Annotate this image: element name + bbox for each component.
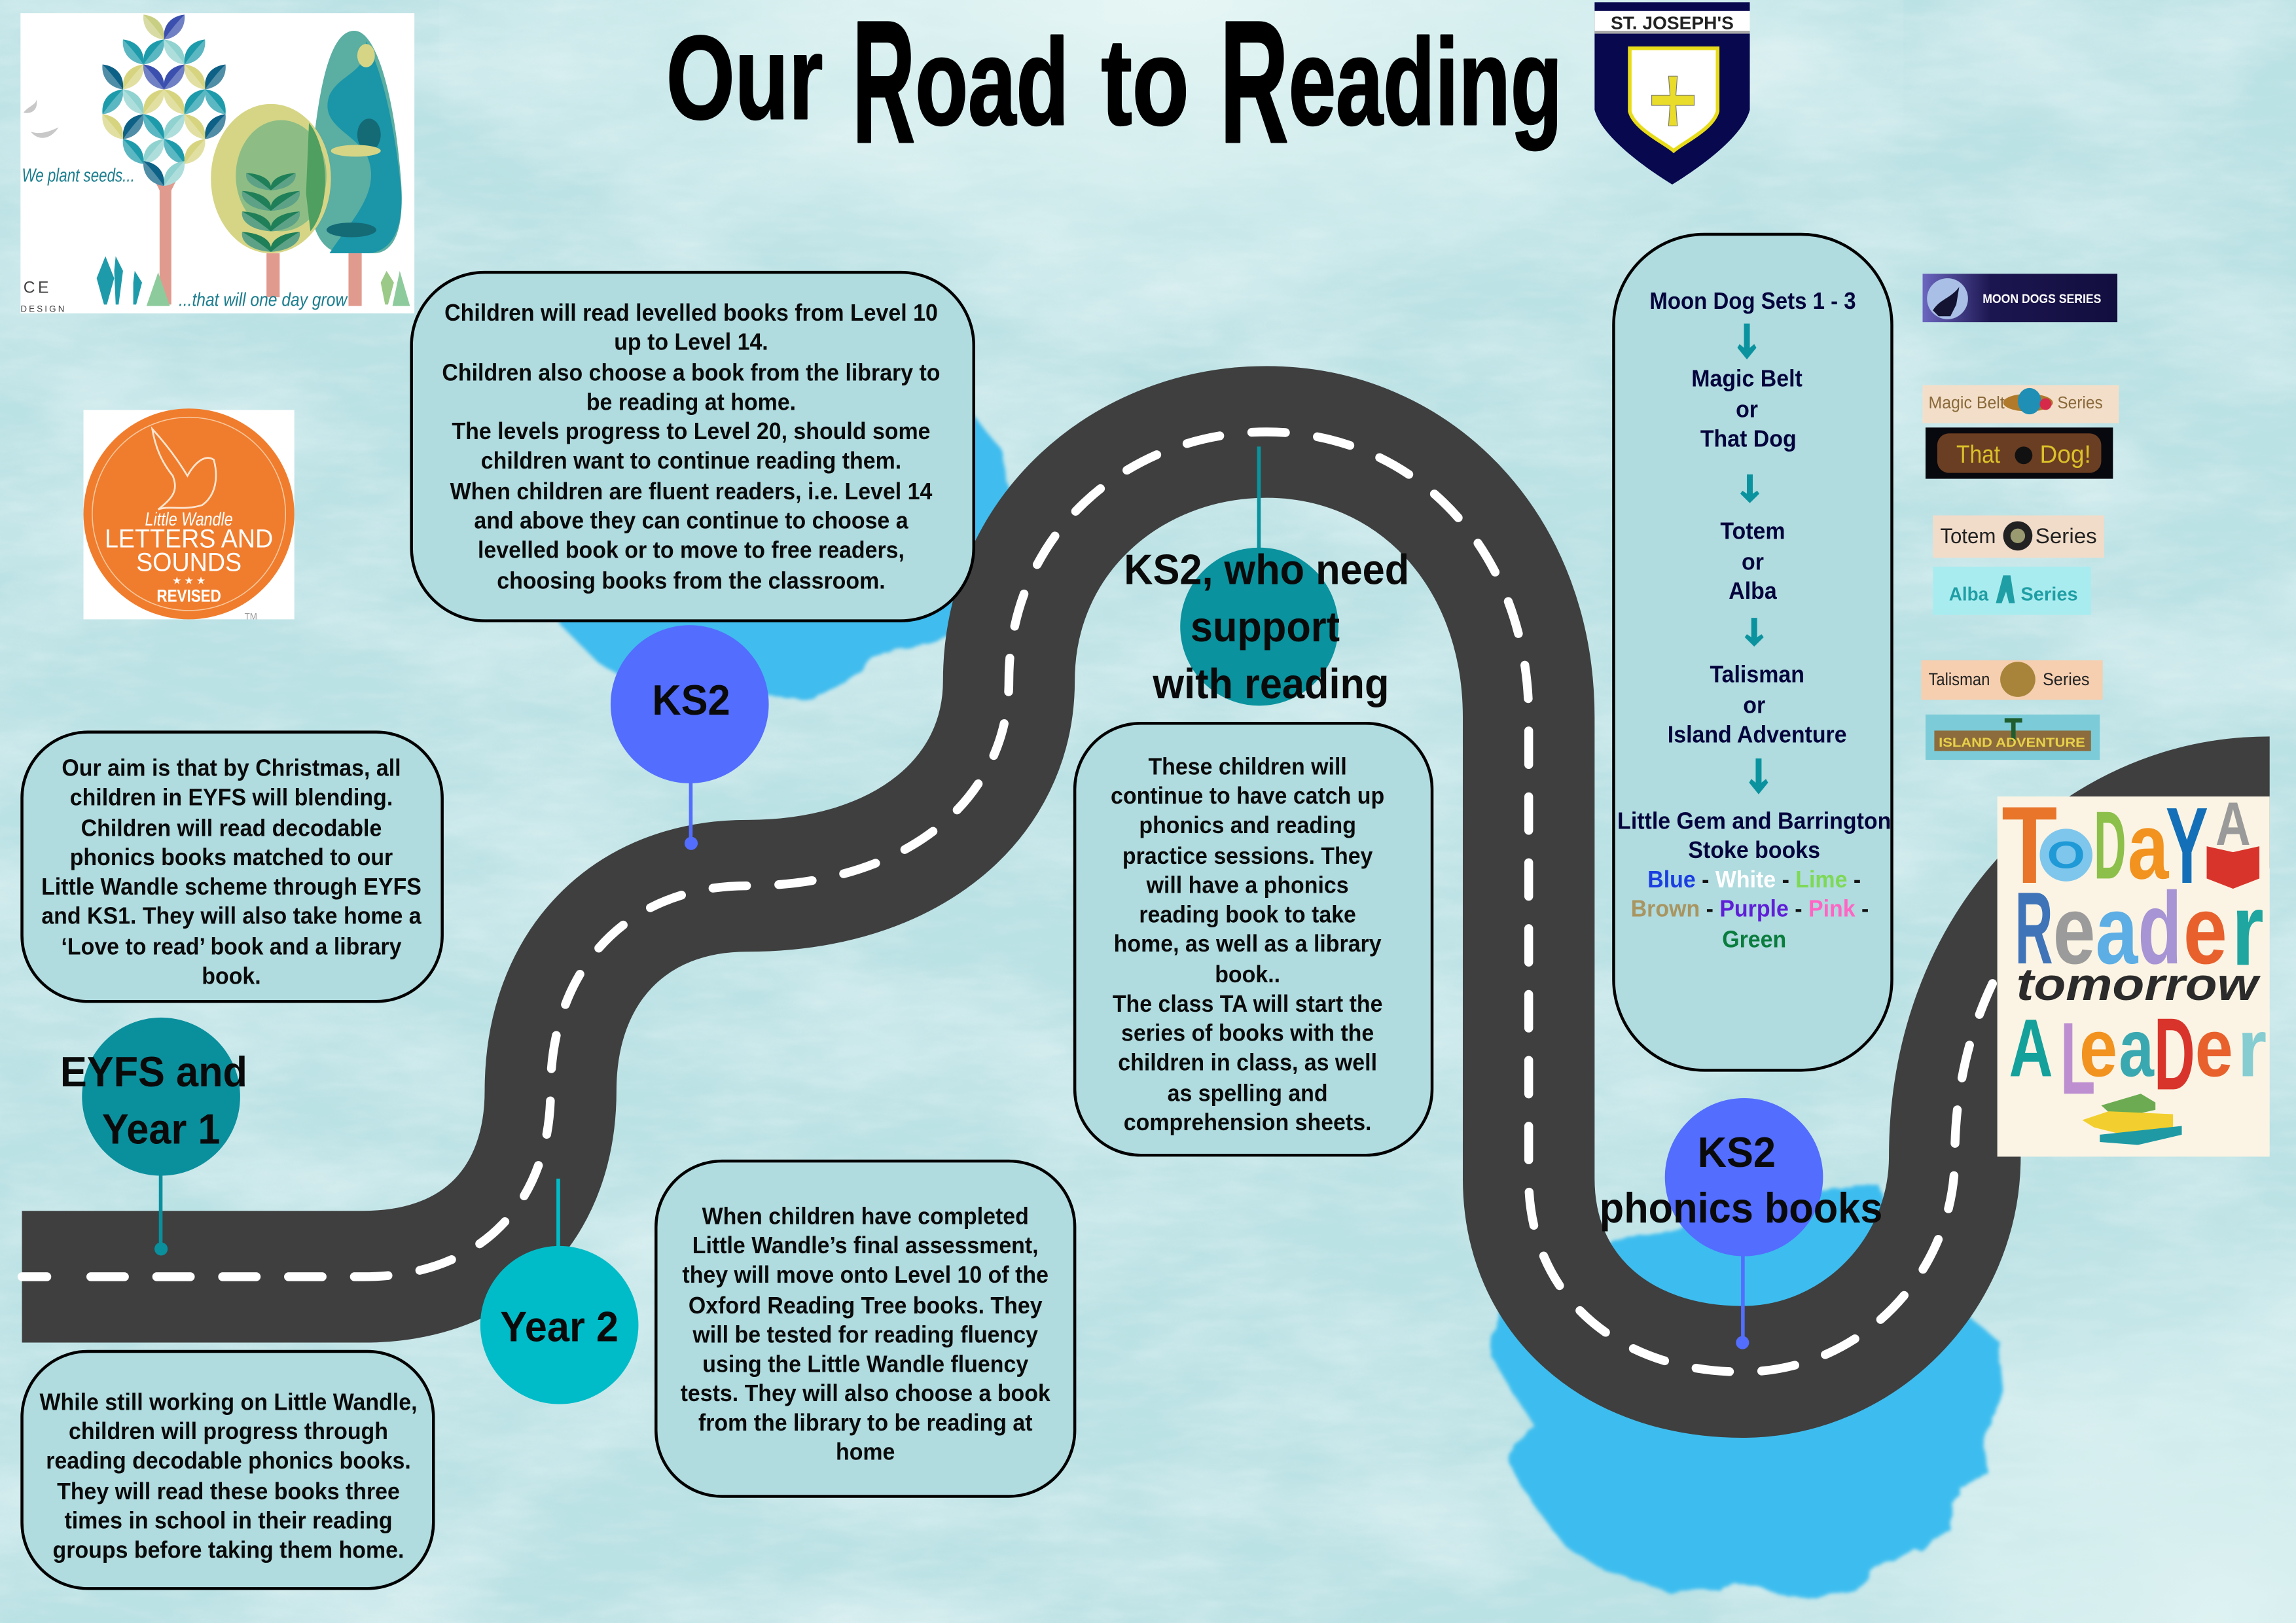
poster: Today a Reader tomorrow a Leader: L [2060, 1001, 2095, 1116]
panel: KS2 who need support: continue to have catch up [1111, 783, 1384, 810]
panel: KS2 phonics book series: or [1743, 692, 1765, 719]
marker: EYFS and Year 1: Year 1 [102, 1106, 220, 1153]
image: We plant seeds tree logo [20, 13, 414, 314]
poster: Today a Reader tomorrow a Leader: O [2047, 834, 2085, 877]
panel: Year 2: using the Little Wandle fluency [702, 1351, 1029, 1378]
panel: KS2: and above they can continue to choose a [474, 508, 908, 534]
panel: EYFS: and KS1. They will also take home a [41, 903, 422, 929]
panel: KS2 who need support: practice sessions. They [1122, 843, 1373, 869]
title: to [1101, 14, 1189, 151]
panel: KS2: children want to continue reading them. [481, 448, 901, 474]
panel: KS2 phonics book series: Moon Dog Sets 1 - 3 [1649, 289, 1856, 314]
panel: KS2 phonics book series: or [1742, 548, 1764, 575]
panel: KS2 phonics book series: Brown - Purple - Pink - [1631, 895, 1869, 922]
road [22, 432, 2270, 1372]
banner: That Dog [1926, 427, 2113, 479]
panel: KS2 who need support: These children will [1148, 753, 1347, 780]
panel: KS2: up to Level 14. [614, 329, 768, 355]
panel: KS2 who need support: book.. [1215, 961, 1280, 988]
image: We plant seeds tree logo: We plant seeds... [22, 165, 135, 186]
marker: KS2 phonics books [1600, 1098, 1882, 1349]
panel: EYFS: Little Wandle scheme through EYFS [41, 874, 422, 900]
panel: KS2 phonics book series: Stoke books [1688, 837, 1820, 863]
panel: KS2 who need support: as spelling and [1168, 1080, 1328, 1107]
poster: Today a Reader tomorrow a Leader: T [2001, 783, 2057, 906]
marker: KS2 phonics books: KS2 [1698, 1130, 1776, 1176]
panel: Year 2: Little Wandle’s final assessment, [692, 1232, 1039, 1258]
panel: KS2 phonics book series: Green [1722, 926, 1786, 953]
panel: Year 1 progress: times in school in their reading [64, 1508, 393, 1534]
poster: Today a Reader tomorrow a Leader: d [2138, 871, 2181, 986]
marker: Year 2: Year 2 [500, 1304, 619, 1351]
banner: Magic Belt Series: Magic Belt [1928, 394, 2005, 412]
panel: Year 1 progress [22, 1351, 433, 1588]
panel: KS2 phonics book series: Talisman [1710, 661, 1804, 688]
poster: Today a Reader tomorrow a Leader: e [2079, 1002, 2117, 1094]
marker: Year 2 [480, 1179, 638, 1404]
panel: Year 2: tests. They will also choose a book [681, 1380, 1050, 1406]
image: Little Wandle Letters and Sounds badge: ★ ★ ★ [172, 576, 206, 587]
arrow [1749, 758, 1768, 794]
image: Little Wandle Letters and Sounds badge: SOUNDS [136, 548, 242, 577]
panel: Year 1 progress: While still working on Little Wandle, [40, 1389, 418, 1416]
poster: Today a Reader tomorrow a Leader: r [2238, 1002, 2267, 1094]
title: Our [666, 12, 823, 144]
banner: Talisman Series: Series [2043, 669, 2090, 689]
panel: EYFS: children in EYFS will blending. [70, 784, 393, 811]
panel: Year 1 progress: groups before taking them home. [53, 1537, 404, 1563]
banner: That Dog: Dog! [2039, 441, 2091, 469]
panel: Year 2: from the library to be reading at [698, 1410, 1033, 1436]
panel: KS2 who need support [1075, 723, 1432, 1155]
panel: EYFS: Our aim is that by Christmas, all [62, 755, 401, 781]
panel: KS2: The levels progress to Level 20, should some [452, 418, 931, 444]
panel: Year 2: they will move onto Level 10 of the [682, 1262, 1049, 1288]
poster: Today a Reader tomorrow a Leader: a [2095, 876, 2139, 984]
banner: Totem Series [1933, 516, 2104, 558]
marker: KS2 who need support with reading [1124, 446, 1409, 708]
banner: That Dog: That [1956, 441, 2000, 469]
image: Little Wandle Letters and Sounds badge: LETTERS AND [105, 524, 273, 554]
poster: Today a Reader tomorrow a Leader: a [2119, 1002, 2155, 1094]
banner: Totem Series: Totem [1940, 524, 1996, 548]
arrow [1745, 618, 1764, 647]
image: Little Wandle Letters and Sounds badge [84, 408, 295, 621]
panel: KS2 who need support: children in class, as well [1118, 1049, 1377, 1076]
poster: Today a Reader tomorrow a Leader: Y [2166, 785, 2208, 906]
banner: Alba Series: Alba [1949, 584, 1989, 605]
panel: Year 2: will be tested for reading fluency [692, 1321, 1038, 1348]
panel: KS2: levelled book or to move to free readers, [478, 537, 905, 563]
panel: Year 2 [656, 1161, 1075, 1496]
school crest: St Joseph's [1594, 2, 1750, 185]
banner: Talisman Series: Talisman [1928, 669, 1990, 689]
panel: KS2 [412, 272, 974, 621]
blue paint splash behind KS2 [556, 399, 1013, 697]
panel: KS2 who need support: phonics and reading [1139, 812, 1356, 838]
title [666, 0, 1562, 179]
marker: KS2: KS2 [652, 677, 730, 724]
title: oad [915, 14, 1069, 151]
image: Little Wandle Letters and Sounds badge: REVISED [156, 586, 221, 606]
panel: KS2: Children will read levelled books from Level 10 [444, 300, 938, 326]
poster: Today a Reader tomorrow a Leader: e [2053, 876, 2095, 984]
school crest: St Joseph's: ST. JOSEPH'S [1611, 13, 1734, 33]
banner: Moon Dogs Series: MOON DOGS SERIES [1982, 293, 2101, 306]
panel: KS2: Children also choose a book from the library to [442, 360, 941, 386]
title: eading [1289, 14, 1562, 151]
arrow [1740, 474, 1759, 503]
banner: Island Adventure: ISLAND ADVENTURE [1939, 736, 2085, 750]
panel: KS2 phonics book series: Blue - White - Lime - [1647, 866, 1861, 893]
image: Little Wandle Letters and Sounds badge: TM [245, 611, 257, 621]
image: Little Wandle Letters and Sounds badge: Little Wandle [145, 509, 233, 530]
poster: Today a Reader tomorrow a Leader: A [2215, 789, 2251, 858]
panel: Year 1 progress: reading decodable phonics books. [46, 1448, 411, 1474]
panel: Year 1 progress: They will read these books three [57, 1478, 400, 1505]
poster: Today a Reader tomorrow a Leader: A [2009, 1002, 2053, 1094]
panel: Year 2: When children have completed [702, 1203, 1029, 1230]
panel: EYFS: book. [202, 963, 261, 990]
panel: EYFS: Children will read decodable [81, 815, 382, 842]
panel: KS2 who need support: series of books with the [1121, 1020, 1374, 1046]
panel: KS2 who need support: will have a phonics [1146, 872, 1349, 899]
panel: Year 2: home [836, 1438, 895, 1465]
poster: Today a Reader tomorrow a Leader [1998, 783, 2270, 1156]
poster: Today a Reader tomorrow a Leader: D [2154, 997, 2195, 1112]
panel: KS2 phonics book series: or [1736, 397, 1758, 423]
panel: EYFS [22, 732, 442, 1001]
panel: Year 1 progress: children will progress through [69, 1418, 388, 1445]
panel: KS2: When children are fluent readers, i.e. Level 14 [450, 478, 933, 505]
poster: Today a Reader tomorrow a Leader: e [2195, 1002, 2233, 1094]
panel: KS2 phonics book series [1613, 234, 1892, 1070]
poster: Today a Reader tomorrow a Leader: R [2015, 871, 2053, 986]
marker: EYFS and Year 1 [60, 1018, 247, 1255]
panel: KS2 phonics book series: Island Adventure [1668, 721, 1847, 748]
marker: KS2 phonics books: phonics books [1600, 1185, 1882, 1232]
panel: KS2 who need support: home, as well as a library [1114, 931, 1382, 957]
panel: KS2 phonics book series: That Dog [1700, 425, 1797, 452]
arrow [1737, 323, 1757, 359]
banner: Magic Belt Series [1923, 385, 2119, 423]
panel: EYFS: phonics books matched to our [70, 844, 393, 871]
image: We plant seeds tree logo: ...that will one day grow [179, 290, 348, 311]
poster: Today a Reader tomorrow a Leader: r [2232, 872, 2264, 987]
panel: EYFS: ‘Love to read’ book and a library [61, 934, 402, 960]
marker: KS2 who need support with reading: with reading [1152, 661, 1389, 708]
panel: KS2: choosing books from the classroom. [497, 567, 886, 594]
banner: Island Adventure [1926, 715, 2100, 760]
poster: Today a Reader tomorrow a Leader: e [2183, 876, 2227, 984]
image: We plant seeds tree logo: DESIGN [20, 304, 67, 314]
panel: KS2 who need support: The class TA will start the [1113, 991, 1382, 1017]
banner: Talisman Series [1921, 660, 2103, 700]
image: We plant seeds tree logo: CE [24, 279, 52, 296]
panel: KS2 phonics book series: Magic Belt [1691, 366, 1803, 392]
panel: Year 2: Oxford Reading Tree books. They [689, 1293, 1043, 1319]
banner: Alba Series [1933, 567, 2091, 615]
banner: Alba Series: Series [2020, 584, 2078, 605]
marker: KS2 [611, 625, 769, 850]
banner: Magic Belt Series: Series [2057, 394, 2103, 412]
panel: KS2 phonics book series: Alba [1729, 578, 1777, 604]
poster: Today a Reader tomorrow a Leader: tomorrow [2017, 959, 2261, 1010]
panel: KS2 who need support: comprehension sheets. [1124, 1109, 1371, 1135]
poster: Today a Reader tomorrow a Leader: a [2128, 794, 2169, 899]
panel: KS2: be reading at home. [586, 389, 796, 416]
blue paint splash behind KS2 phonics books [1489, 1185, 2001, 1602]
panel: KS2 phonics book series: Totem [1720, 518, 1785, 544]
marker: EYFS and Year 1: EYFS and [60, 1048, 247, 1096]
marker: KS2 who need support with reading: support [1191, 603, 1340, 651]
panel: KS2 who need support: reading book to take [1139, 901, 1356, 928]
banner: Totem Series: Series [2036, 524, 2097, 548]
poster: Today a Reader tomorrow a Leader: D [2094, 791, 2126, 899]
banner: Moon Dogs Series [1923, 274, 2117, 322]
marker: KS2 who need support with reading: KS2, who need [1124, 546, 1409, 594]
panel: KS2 phonics book series: Little Gem and Barrington [1617, 808, 1891, 834]
